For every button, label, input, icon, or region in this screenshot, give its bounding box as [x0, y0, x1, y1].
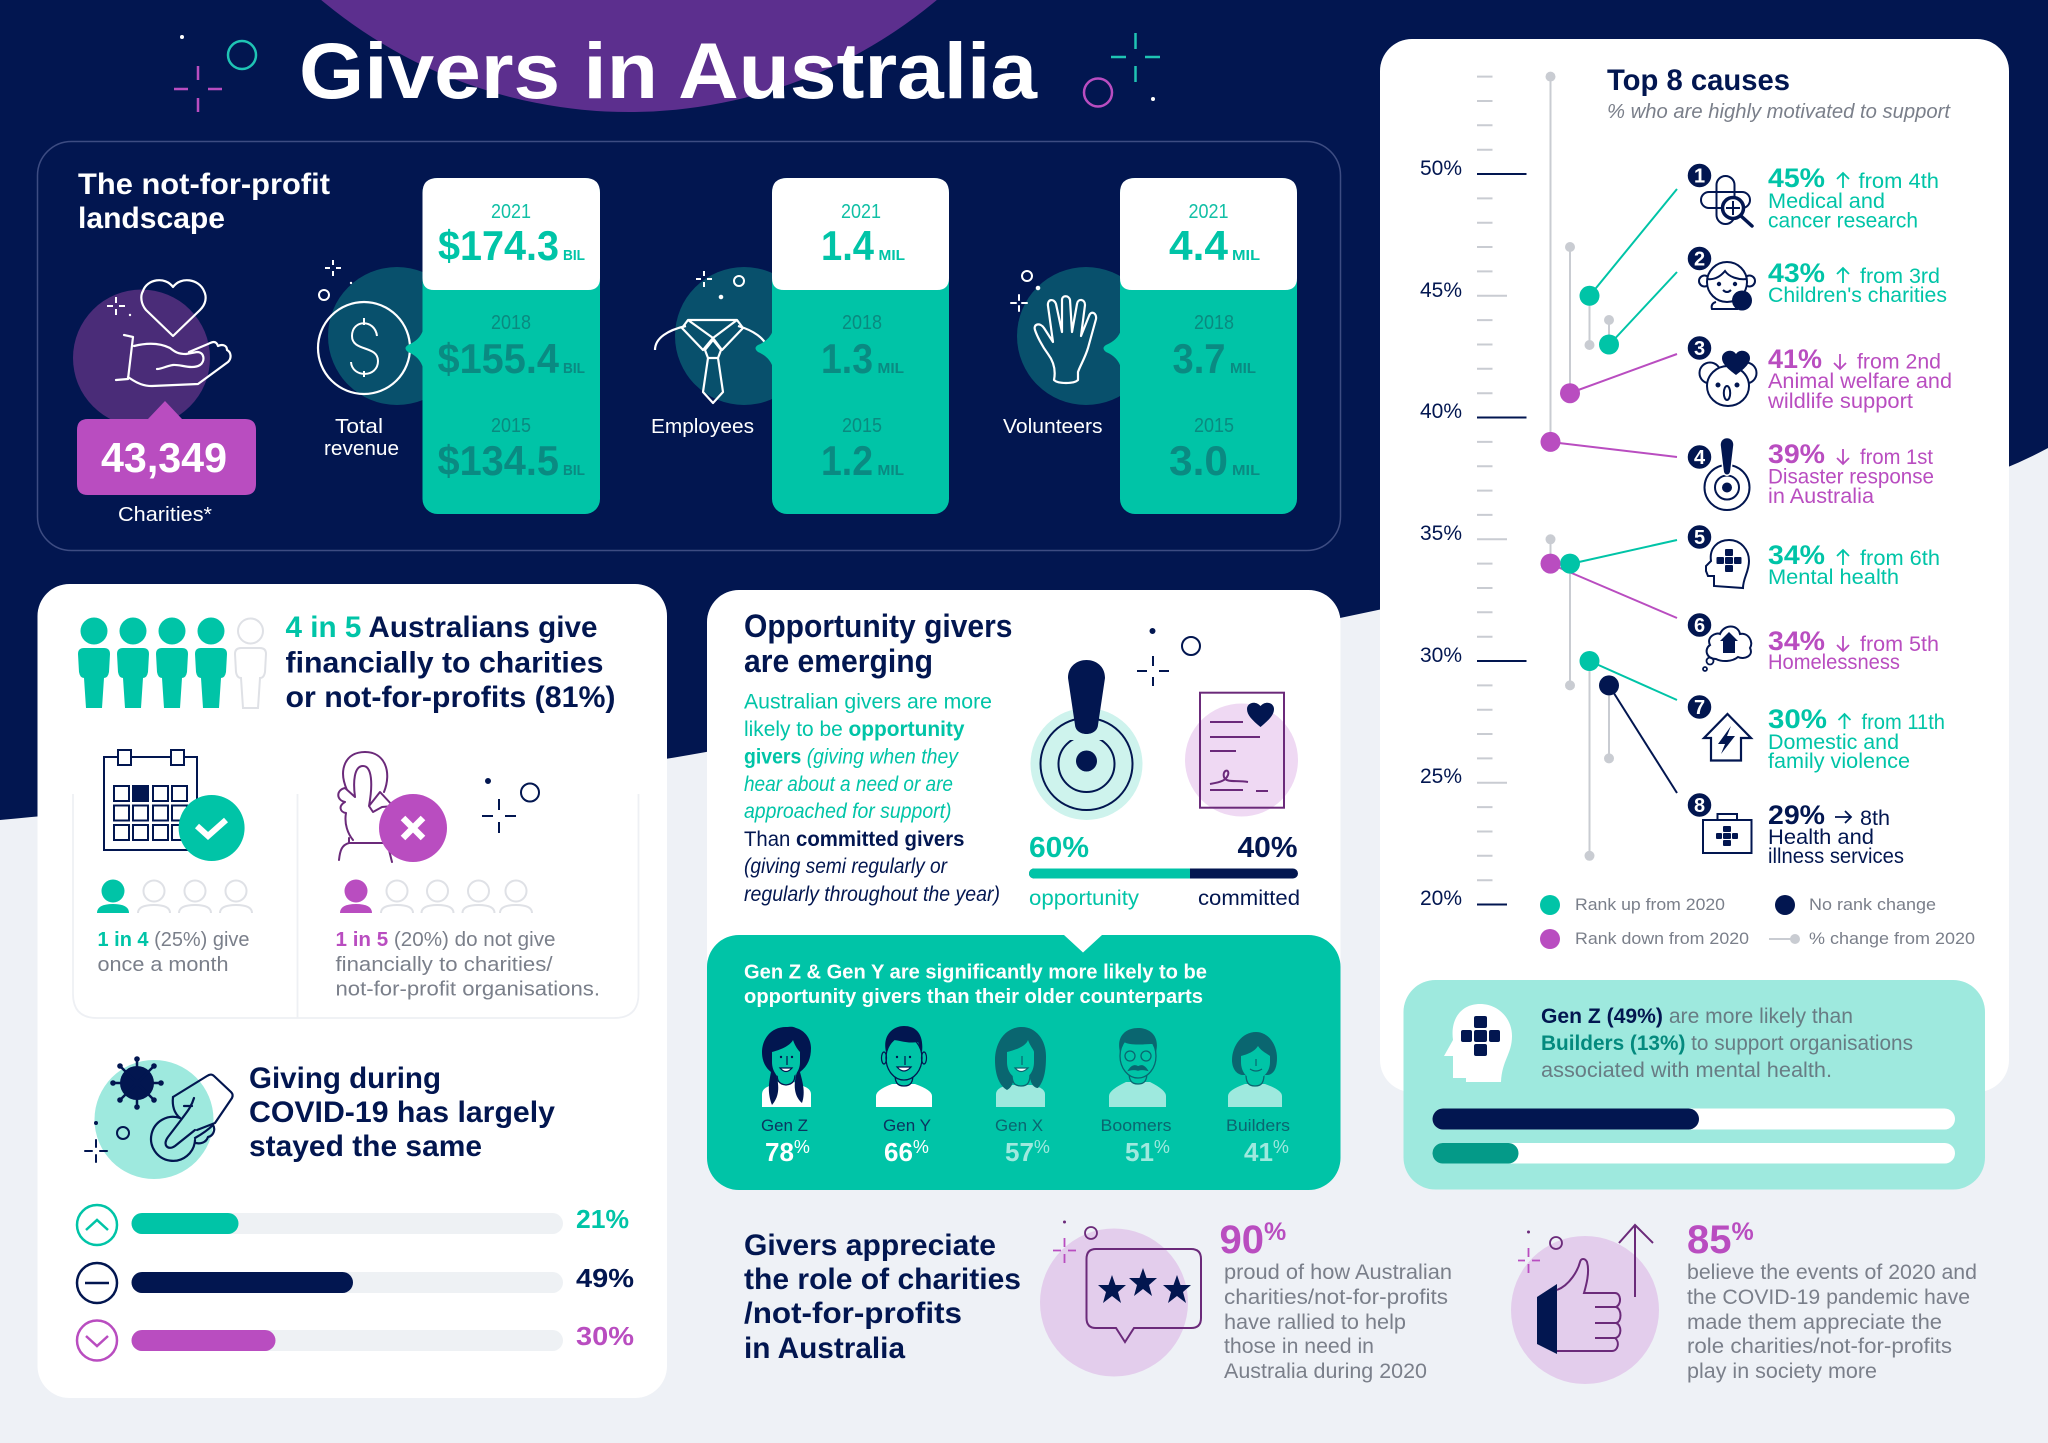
heading: givers appreciate	[744, 1229, 1021, 1365]
paragraph: givers (giving when they	[744, 746, 959, 768]
heading: givers appreciate: in Australia	[744, 1332, 905, 1365]
number badges: 2	[1694, 248, 1705, 270]
cause 1 text: 45%	[1768, 163, 1825, 193]
revenue card: BIL	[563, 360, 585, 377]
generation labels: Builders	[1226, 1116, 1290, 1135]
icon: calendar with tick	[104, 750, 245, 861]
icon: covid hand	[85, 1056, 233, 1179]
heading: givers appreciate: the role of charities	[744, 1263, 1021, 1296]
text: 1 in 5: 1 in 5 (20%) do not give	[336, 929, 556, 951]
generations heading: Gen Z & Gen Y are significantly more likely to be	[744, 962, 1207, 984]
axis: 25%	[1420, 765, 1462, 788]
generation values: 66	[884, 1137, 913, 1167]
axis	[1420, 77, 1526, 910]
text: 1 in 5	[336, 929, 600, 1000]
cause 7 text: 30%	[1768, 704, 1827, 734]
cause 2 text: from 3rd	[1860, 265, 1940, 288]
icon: hand	[1011, 267, 1155, 405]
panel: mental health callout	[1404, 980, 1985, 1190]
volunteers card: 4.4	[1169, 222, 1229, 269]
icon: target with exclamation	[1030, 660, 1142, 820]
revenue group	[318, 178, 600, 514]
purple title circle	[150, 0, 1108, 112]
volunteers card: 2015	[1194, 415, 1234, 437]
icon: child	[1699, 262, 1755, 310]
cause 7 text	[1768, 704, 1945, 773]
heading: givers appreciate: /not-for-profits	[744, 1297, 962, 1330]
heading: 4 in 5: or not-for-profits (81%)	[286, 681, 616, 714]
cause 3 text: from 2nd	[1857, 350, 1941, 374]
employees card: 2018	[842, 312, 882, 334]
revenue card: 2015	[491, 415, 531, 437]
callout text: associated with mental health.	[1541, 1059, 1832, 1082]
generations heading	[744, 962, 1207, 1008]
revenue card	[406, 178, 600, 514]
volunteers card	[1104, 178, 1297, 514]
heading: 4 in 5: 4 in 5 Australians give	[286, 611, 598, 644]
split bar: 60 / 40	[1029, 832, 1300, 910]
revenue card: 2021	[491, 201, 531, 223]
cause 6 text: from 5th	[1860, 633, 1939, 656]
heading: givers appreciate: Givers appreciate	[744, 1229, 996, 1262]
bar chart: giving change: 30%	[576, 1321, 634, 1351]
icon: white head	[1444, 1004, 1512, 1082]
heading: covid	[249, 1062, 555, 1163]
heading: top 8 causes: Top 8 causes	[1607, 64, 1790, 97]
landscape heading: The not-for-profit	[78, 168, 330, 201]
person: Gen Z	[762, 1027, 811, 1107]
generation values: 41	[1244, 1137, 1273, 1167]
cause 7 text: Domestic and	[1768, 731, 1899, 754]
revenue card: $134.5	[438, 437, 559, 484]
stat: 85%	[1687, 1218, 1977, 1383]
split bar: 60 / 40: opportunity	[1029, 887, 1140, 910]
number badges: 6	[1694, 615, 1705, 637]
cause 1 text: from 4th	[1858, 170, 1939, 193]
number badges: 8	[1694, 795, 1705, 817]
generation labels: Gen Z	[761, 1116, 808, 1135]
employees card: MIL	[878, 462, 904, 479]
icon: disaster target	[1704, 438, 1750, 510]
bar chart: giving change: 49%	[576, 1263, 634, 1293]
split bar: 60 / 40: committed	[1198, 887, 1300, 910]
cause 6 text: Homelessness	[1768, 651, 1900, 674]
revenue label: revenue	[324, 438, 399, 460]
cause 4 text: 39%	[1768, 439, 1825, 469]
revenue label: Total	[335, 416, 383, 438]
revenue card: BIL	[563, 462, 585, 479]
cause 7 text: from 11th	[1862, 711, 1945, 734]
icon: domestic violence house	[1704, 714, 1751, 760]
employees card: MIL	[878, 247, 905, 264]
stat: 90%: have rallied to help	[1224, 1311, 1406, 1334]
charities count box	[77, 401, 256, 495]
generation values	[765, 1137, 1289, 1167]
icon: contract	[1185, 693, 1298, 816]
panel: top 8 causes	[1380, 39, 2009, 1092]
stat: 85%: made them appreciate the	[1687, 1311, 1942, 1334]
stat: 85%: the COVID-19 pandemic have	[1687, 1286, 1970, 1309]
employees card: 1.2	[821, 437, 873, 484]
employees card: 1.3	[821, 335, 873, 382]
cause 3 text	[1767, 344, 1952, 413]
cause 8 text: 29%	[1768, 800, 1825, 830]
stat: 85%: believe the events of 2020 and	[1687, 1261, 1977, 1284]
cause 2 text: Children's charities	[1768, 284, 1947, 307]
employees card: 2015	[842, 415, 882, 437]
cause 1 text	[1768, 163, 1939, 232]
paragraph: regularly throughout the year)	[744, 883, 1000, 906]
heading: 4 in 5	[286, 611, 616, 714]
charities count box: 43,349	[101, 434, 227, 481]
generation values: %	[1273, 1137, 1289, 1157]
landscape heading	[78, 168, 330, 235]
stat: 85%: %	[1732, 1218, 1754, 1246]
icon: tie	[655, 267, 813, 405]
number badges: 1	[1694, 166, 1705, 188]
legend	[1540, 895, 1975, 949]
sparkles	[482, 779, 539, 833]
charities label: Charities*	[118, 504, 212, 526]
panel: generations	[707, 935, 1340, 1190]
legend: % change from 2020	[1809, 929, 1975, 948]
axis: 35%	[1420, 522, 1462, 545]
cause 8 text: 8th	[1860, 807, 1890, 830]
generation values: %	[1034, 1137, 1050, 1157]
volunteers card: MIL	[1232, 462, 1260, 479]
cause 7 text: family violence	[1768, 750, 1910, 773]
stat: 90%	[1220, 1218, 1452, 1383]
generation values: %	[1154, 1137, 1170, 1157]
icon: health kit	[1703, 814, 1752, 853]
person: Boomers	[1109, 1028, 1166, 1107]
paragraph: (giving semi regularly or	[744, 855, 948, 878]
cause 4 text	[1768, 439, 1934, 508]
people row: 1 in 4	[97, 880, 252, 913]
revenue card: $174.3	[438, 222, 559, 269]
cause 3 text: wildlife support	[1767, 390, 1913, 413]
cause 1 text: Medical and	[1768, 190, 1885, 213]
cause 6 text	[1768, 626, 1939, 674]
icon: homelessness cloud	[1703, 626, 1751, 671]
paragraph: Australian givers are more	[744, 690, 992, 714]
stat: 85%: play in society more	[1687, 1360, 1877, 1383]
axis: 45%	[1420, 279, 1462, 302]
stat: 90%: %	[1264, 1218, 1286, 1246]
employees card: 1.4	[821, 222, 875, 269]
connectors	[1550, 189, 1677, 793]
number badges: 3	[1694, 338, 1705, 360]
icon: hand with cross	[338, 752, 447, 862]
subtitle: % who are highly motivated to support	[1607, 101, 1951, 123]
axis: 40%	[1420, 400, 1462, 423]
sub-panel outline	[73, 794, 638, 1018]
stat: 90%: charities/not-for-profits	[1224, 1286, 1448, 1309]
stat: 90%: Australia during 2020	[1224, 1360, 1427, 1383]
paragraph: Than committed givers	[744, 828, 964, 851]
icon: medical research	[1701, 176, 1752, 226]
cause 6 text: 34%	[1768, 626, 1825, 656]
panel: 4 in 5 Australians give	[38, 584, 667, 1398]
split bar: 60 / 40: 60%	[1029, 832, 1089, 864]
text: 1 in 4: 1 in 4 (25%) give	[98, 929, 250, 951]
panel: opportunity givers	[707, 590, 1340, 990]
heading: covid: stayed the same	[249, 1130, 482, 1163]
rank dots	[1540, 286, 1619, 695]
employees card: MIL	[878, 360, 904, 377]
volunteers group	[1003, 178, 1297, 514]
volunteers card: MIL	[1232, 247, 1260, 264]
stat: 85%: 85	[1687, 1218, 1732, 1262]
person: Gen X	[995, 1027, 1046, 1107]
icon: speech bubble stars	[1040, 1220, 1201, 1376]
heading: opportunity givers: Opportunity givers	[744, 608, 1012, 644]
heading: covid: COVID-19 has largely	[249, 1096, 555, 1129]
cause 8 text: Health and	[1768, 826, 1874, 849]
people row: 1 in 5	[340, 880, 532, 913]
cause 4 text: from 1st	[1860, 446, 1933, 469]
stat: 90%: proud of how Australian	[1224, 1261, 1452, 1284]
paragraph: likely to be opportunity	[744, 718, 965, 741]
stat: 90%: 90	[1220, 1218, 1264, 1262]
volunteers label: Volunteers	[1003, 416, 1102, 438]
generation labels: Gen Y	[883, 1116, 931, 1135]
paragraph: hear about a need or are	[744, 773, 953, 796]
cause 1 text: cancer research	[1768, 210, 1918, 232]
callout text	[1541, 1005, 1913, 1082]
cause 5 text	[1768, 540, 1940, 589]
heading: opportunity givers: are emerging	[744, 643, 933, 679]
text: 1 in 4: once a month	[98, 954, 228, 976]
employees card	[756, 178, 949, 514]
person: Builders	[1228, 1032, 1282, 1107]
heading: opportunity givers	[744, 608, 1012, 679]
landscape heading: landscape	[78, 202, 225, 235]
revenue card: $155.4	[438, 335, 560, 382]
number badges: 7	[1694, 697, 1705, 719]
cause 3 text: Animal welfare and	[1768, 370, 1952, 393]
stat: 85%: role charities/not-for-profits	[1687, 1335, 1952, 1358]
generation values: %	[913, 1137, 929, 1157]
split bar: 60 / 40: 40%	[1238, 832, 1298, 864]
cause 8 text	[1768, 800, 1904, 868]
generation labels	[761, 1116, 1290, 1135]
change lines	[1546, 72, 1614, 861]
generations heading: opportunity givers than their older counterparts	[744, 986, 1203, 1008]
axis: 20%	[1420, 887, 1462, 910]
stat: 90%: those in need in	[1224, 1335, 1374, 1358]
cause 2 text: 43%	[1768, 258, 1825, 288]
cause 4 text: in Australia	[1768, 485, 1874, 508]
icon: koala	[1700, 351, 1756, 406]
callout text: Gen Z (49%) are more likely than	[1541, 1005, 1853, 1028]
axis: 30%	[1420, 644, 1462, 667]
employees card: 2021	[841, 201, 881, 223]
heading: covid: Giving during	[249, 1062, 441, 1095]
volunteers card: MIL	[1230, 360, 1256, 377]
text: 1 in 5: not-for-profit organisations.	[336, 978, 600, 1000]
number badges: 5	[1694, 527, 1705, 549]
cause 3 text: 41%	[1768, 344, 1822, 374]
employees label: Employees	[651, 416, 754, 438]
generation values: 51	[1125, 1137, 1154, 1167]
revenue card: 2018	[491, 312, 531, 334]
cause 5 text: 34%	[1768, 540, 1825, 570]
cause 8 text: illness services	[1768, 845, 1904, 868]
text: 1 in 4	[98, 929, 250, 976]
panel: the not-for-profit landscape	[38, 142, 1340, 550]
icon: dollar	[318, 260, 466, 405]
callout bars	[1432, 1108, 1955, 1164]
volunteers card: 2018	[1194, 312, 1234, 334]
generation values: %	[794, 1137, 810, 1157]
sparkles	[1137, 629, 1200, 686]
revenue card: BIL	[563, 247, 585, 264]
volunteers card: 3.0	[1169, 437, 1228, 484]
legend: Rank down from 2020	[1575, 929, 1749, 948]
generation values: 57	[1005, 1137, 1034, 1167]
person: Gen Y	[876, 1026, 932, 1107]
icon: charities heart and hand	[73, 280, 231, 426]
legend: Rank up from 2020	[1575, 895, 1725, 914]
callout text: Builders (13%) to support organisations	[1541, 1032, 1913, 1055]
title: Givers in Australia	[299, 26, 1038, 115]
icon: five people	[78, 618, 266, 708]
title sparkles right	[1084, 33, 1160, 106]
cause 4 text: Disaster response	[1768, 466, 1934, 488]
legend: No rank change	[1809, 895, 1936, 914]
generation values: 78	[765, 1137, 794, 1167]
number badges: 4	[1694, 447, 1706, 469]
volunteers card: 2021	[1188, 201, 1228, 223]
revenue label	[324, 416, 399, 460]
axis: 50%	[1420, 157, 1462, 180]
paragraph: approached for support)	[744, 800, 952, 823]
employees group	[651, 178, 949, 514]
number badges	[1687, 163, 1712, 818]
bar chart: giving change	[77, 1204, 634, 1360]
paragraph	[744, 690, 1000, 906]
icon: mental health head	[1706, 540, 1749, 588]
volunteers card: 3.7	[1172, 335, 1226, 382]
title sparkles left	[174, 35, 256, 112]
heading: 4 in 5: financially to charities	[286, 646, 604, 680]
cause 5 text: Mental health	[1768, 566, 1899, 589]
generation labels: Boomers	[1100, 1116, 1172, 1135]
icon: thumbs up	[1511, 1225, 1659, 1384]
generation labels: Gen X	[995, 1116, 1043, 1135]
text: 1 in 5: financially to charities/	[336, 954, 553, 976]
cause 2 text	[1768, 258, 1947, 307]
cause 5 text: from 6th	[1860, 547, 1940, 570]
bar chart: giving change: 21%	[576, 1204, 629, 1234]
